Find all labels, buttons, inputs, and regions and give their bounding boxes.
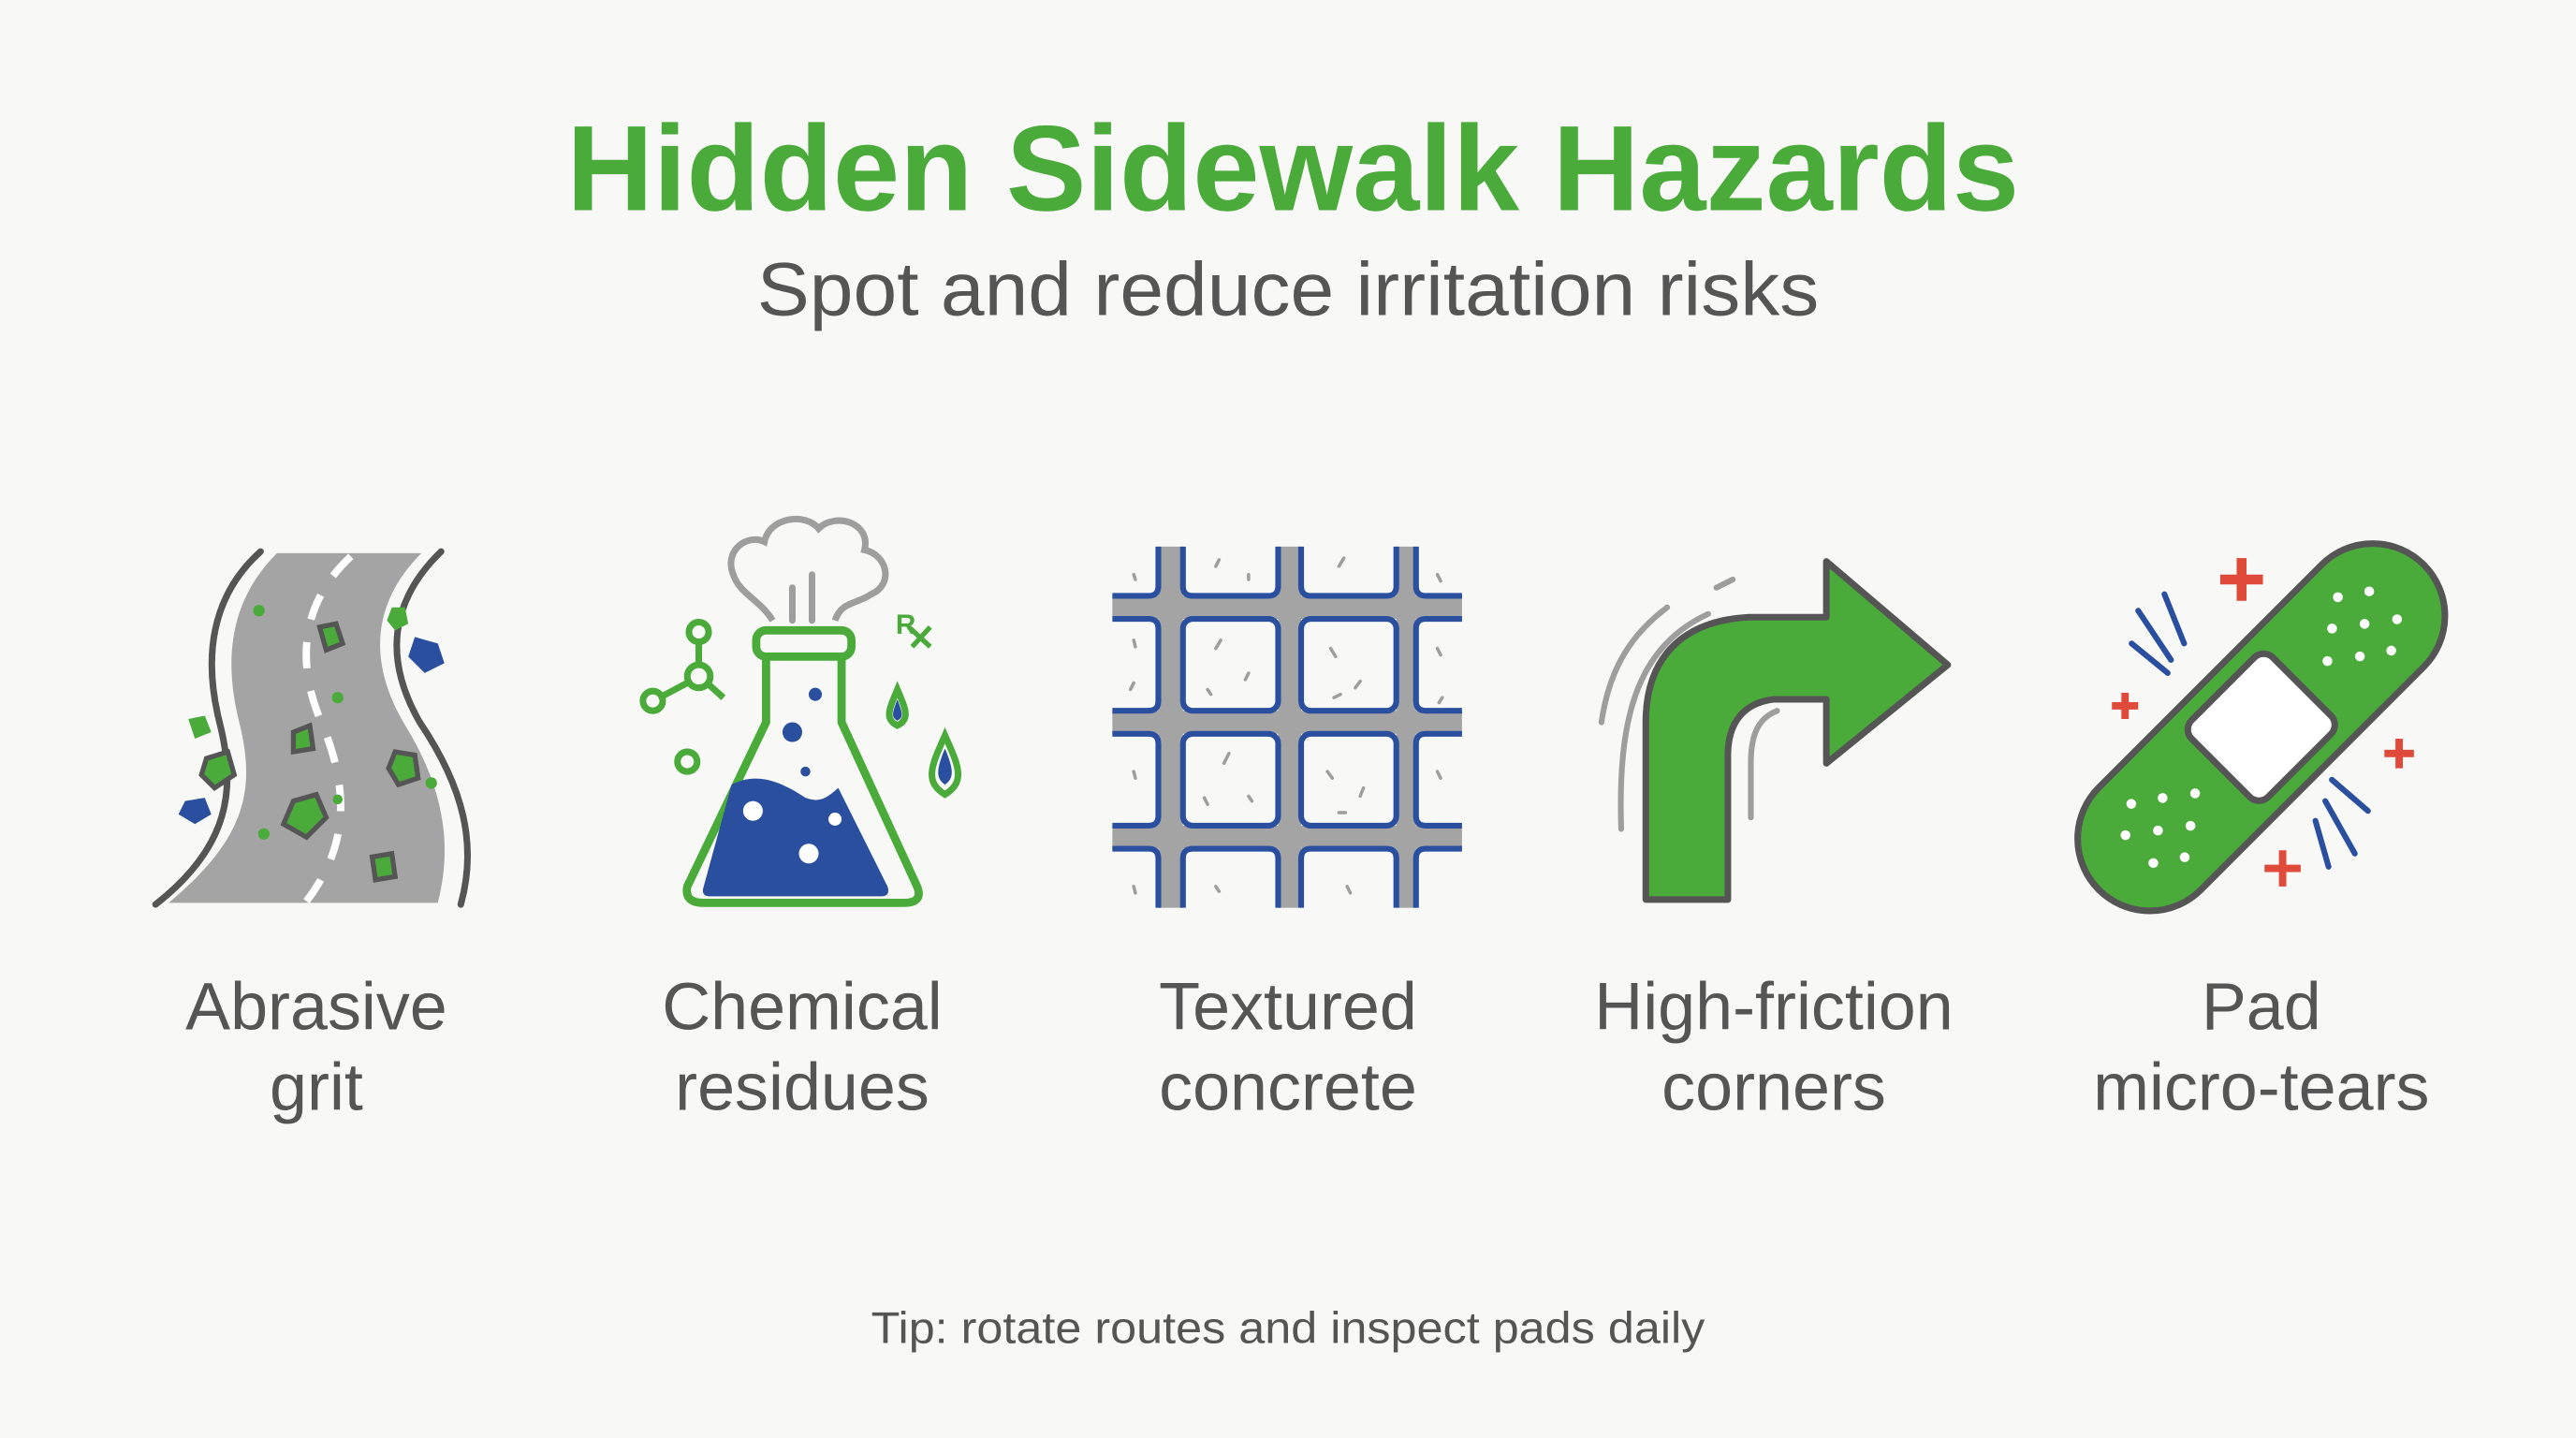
icon: bandage with micro-tears (2048, 514, 2475, 941)
title: Hidden Sidewalk Hazards (566, 101, 2019, 236)
label: textured concrete: concrete (1159, 1049, 1417, 1124)
label: pad micro-tears: micro-tears (2093, 1049, 2429, 1124)
label: abrasive grit: grit (270, 1049, 363, 1124)
icon: road with grit (155, 551, 468, 904)
icon: textured concrete grid (1112, 547, 1462, 908)
label: high-friction corners: High-friction (1594, 969, 1954, 1044)
icon: high-friction corner arrow (1602, 562, 1948, 900)
icon: chemical flask: R (896, 609, 915, 640)
label: pad micro-tears: Pad (2202, 969, 2321, 1044)
label: high-friction corners: corners (1661, 1049, 1886, 1124)
tip footer: Tip: rotate routes and inspect pads daily (871, 1303, 1705, 1353)
label: chemical residues: Chemical (662, 969, 943, 1044)
label: chemical residues: residues (675, 1049, 929, 1124)
icon: chemical flask (643, 519, 959, 902)
label: textured concrete: Textured (1159, 969, 1417, 1044)
subtitle: Spot and reduce irritation risks (757, 248, 1819, 332)
label: abrasive grit: Abrasive (185, 969, 447, 1044)
